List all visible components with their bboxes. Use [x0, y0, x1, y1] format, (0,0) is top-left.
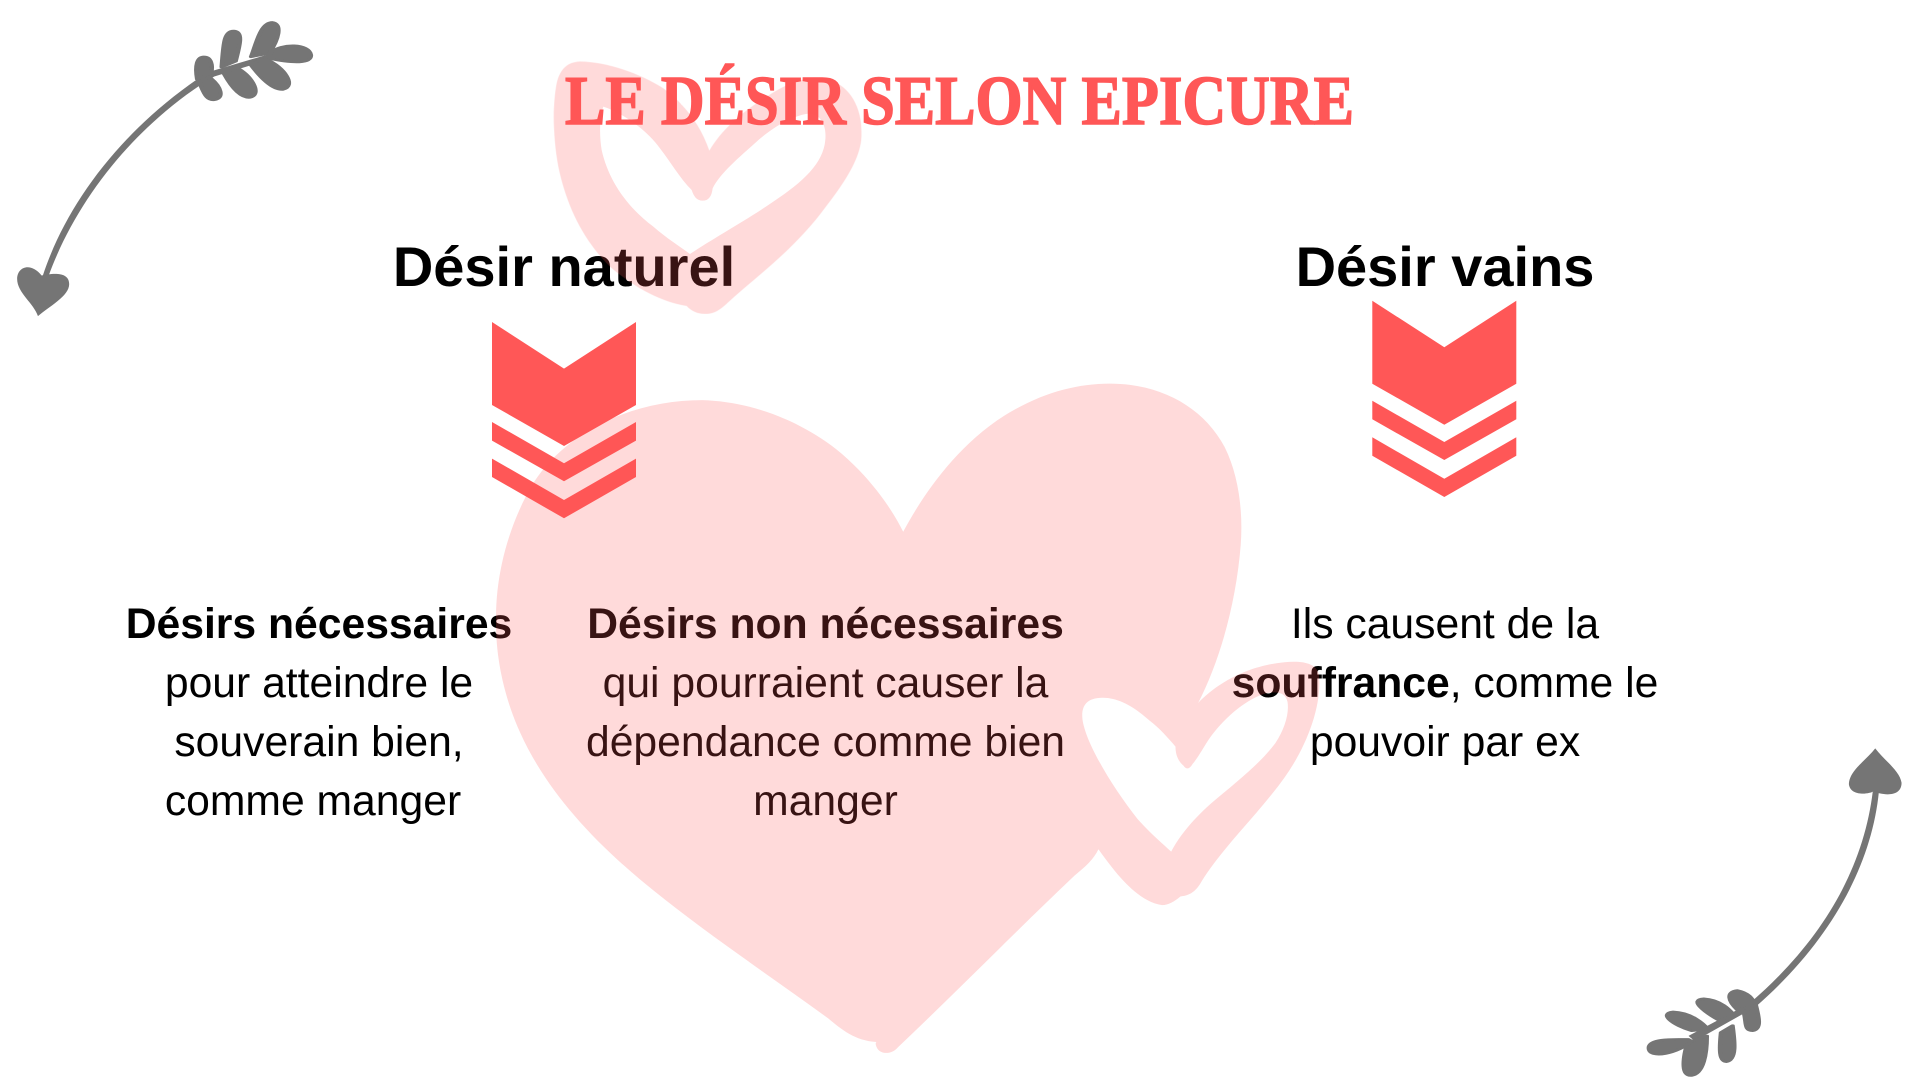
- text block: désirs non nécessaires: qui pourraient causer la: [603, 659, 1048, 707]
- text block: désirs vains: pouvoir par ex: [1310, 718, 1580, 766]
- text block: désirs vains: souffrance, comme le: [1232, 659, 1658, 707]
- text block: désirs non nécessaires: manger: [753, 777, 898, 825]
- heart: top outlined heart: [554, 62, 862, 314]
- text block: désirs nécessaires: pour atteindre le: [165, 659, 473, 707]
- text block: désirs nécessaires: Désirs nécessaires: [126, 600, 512, 648]
- decorative hearts overlay: [496, 62, 1320, 1053]
- text block: désirs nécessaires: comme manger: [165, 777, 461, 825]
- heading: désir naturel: Désir naturel: [393, 235, 735, 298]
- text block: désirs non nécessaires: [586, 600, 1065, 825]
- text block: désirs nécessaires: [126, 600, 512, 825]
- heart: small outlined heart: [1089, 662, 1319, 905]
- text block: désirs non nécessaires: dépendance comme bien: [586, 718, 1065, 766]
- text block: désirs vains: [1232, 600, 1658, 766]
- heading: désir vains: Désir vains: [1296, 235, 1594, 298]
- text block: désirs vains: Ils causent de la: [1291, 600, 1599, 648]
- heart: large heart with text: [496, 384, 1241, 1053]
- text block: désirs non nécessaires: Désirs non nécessaires: [587, 600, 1064, 648]
- text block: désirs nécessaires: souverain bien,: [174, 718, 464, 766]
- title: LE DÉSIR SELON EPICURE: [565, 63, 1354, 140]
